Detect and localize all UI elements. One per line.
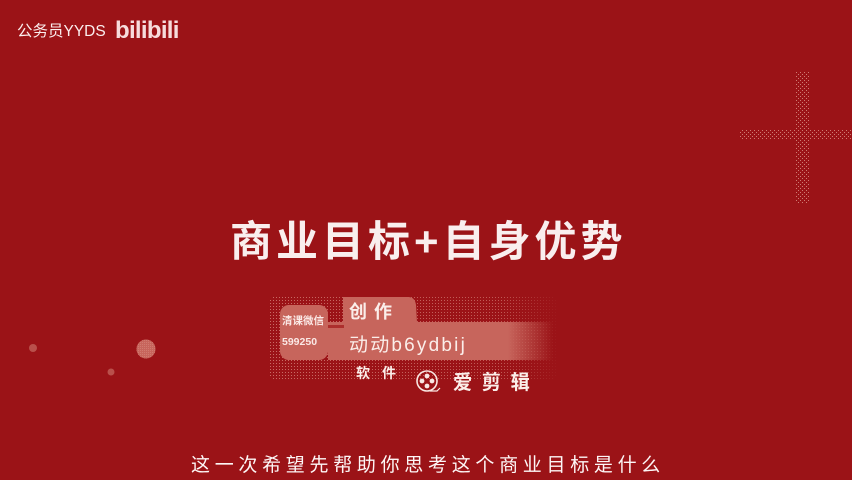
brand name: 爱剪辑 bbox=[453, 372, 539, 394]
main bar bbox=[328, 322, 553, 360]
credit: software label: 软件 bbox=[356, 365, 408, 381]
bilibili logo: bilibili bbox=[115, 17, 179, 44]
credit: number: 599250 bbox=[282, 336, 317, 348]
dither halo bbox=[268, 296, 558, 380]
channel name: 公务员YYDS bbox=[17, 23, 106, 40]
title: 商业目标+自身优势 bbox=[230, 218, 627, 265]
credit: heading: 创作 bbox=[349, 302, 399, 322]
credit: left tab text: 清课微信 bbox=[282, 315, 324, 327]
top tab bbox=[343, 297, 417, 322]
decorative cross bbox=[740, 71, 852, 203]
credit: author: 动动b6ydbij bbox=[349, 335, 467, 356]
decorative circles bbox=[29, 340, 156, 376]
logo panel bbox=[268, 296, 558, 380]
subtitle: 这一次希望先帮助你思考这个商业目标是什么 bbox=[191, 455, 665, 476]
left tab bbox=[280, 305, 328, 360]
